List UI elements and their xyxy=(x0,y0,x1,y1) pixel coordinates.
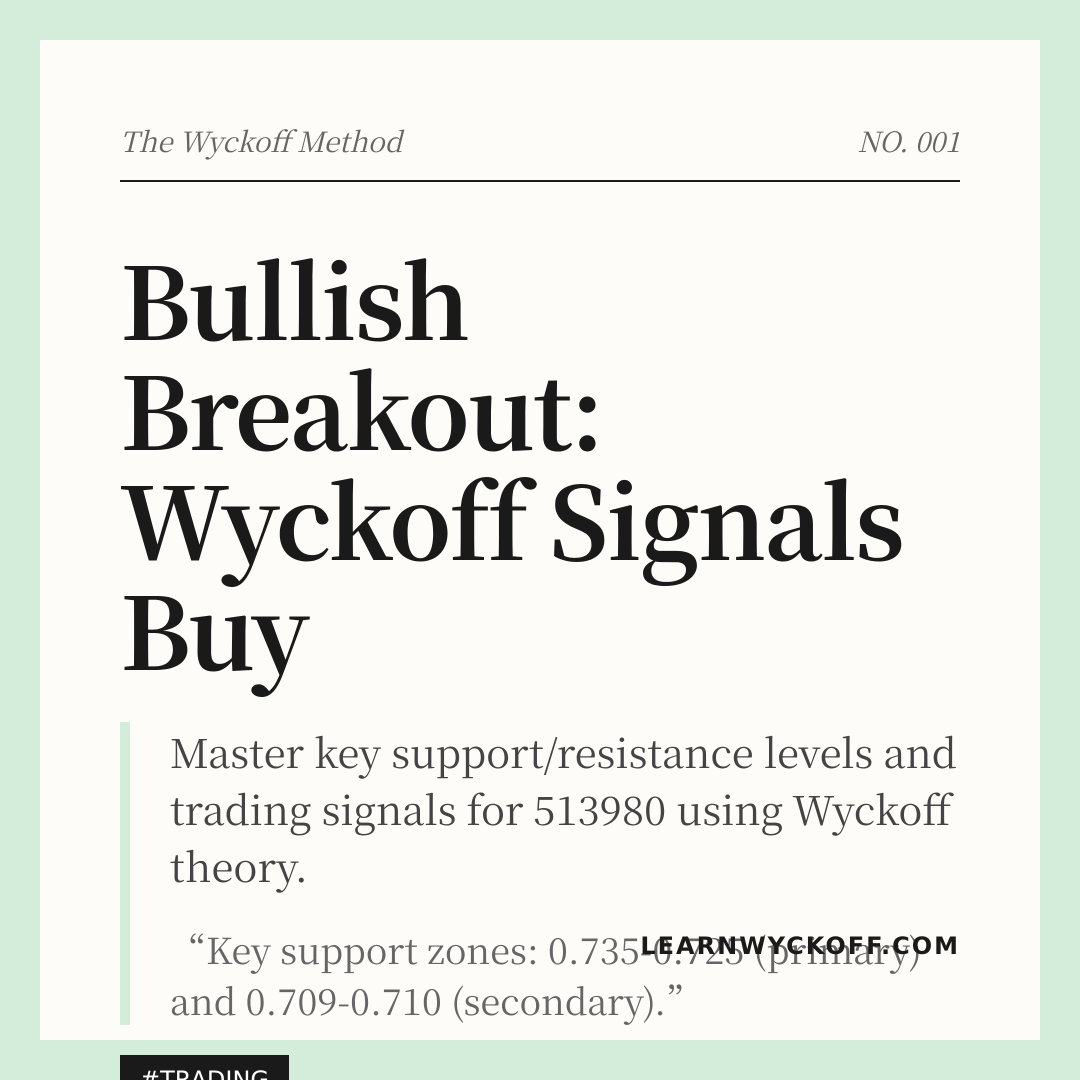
title: Buy xyxy=(120,555,308,699)
header rule xyxy=(120,180,960,182)
website label: LEARNWYCKOFF.COM xyxy=(640,932,960,960)
title: Bullish xyxy=(120,225,468,369)
quote: “Key support zones: 0.735-0.725 (primary) xyxy=(170,924,922,975)
title: Breakout: xyxy=(120,335,602,479)
subtitle text: Master key support/resistance levels and xyxy=(170,723,957,780)
subtitle text: theory. xyxy=(170,837,308,894)
accent bar xyxy=(120,722,130,1025)
subtitle text xyxy=(170,723,957,894)
quote xyxy=(170,924,922,1026)
quote: and 0.709-0.710 (secondary).” xyxy=(170,975,702,1026)
header: issue number: NO. 001 xyxy=(857,121,960,161)
tag: trading xyxy=(120,1055,289,1080)
header: series name: The Wyckoff Method xyxy=(120,121,402,161)
title xyxy=(120,225,903,699)
subtitle text: trading signals for 513980 using Wyckoff xyxy=(170,780,951,837)
title: Wyckoff Signals xyxy=(120,445,903,589)
